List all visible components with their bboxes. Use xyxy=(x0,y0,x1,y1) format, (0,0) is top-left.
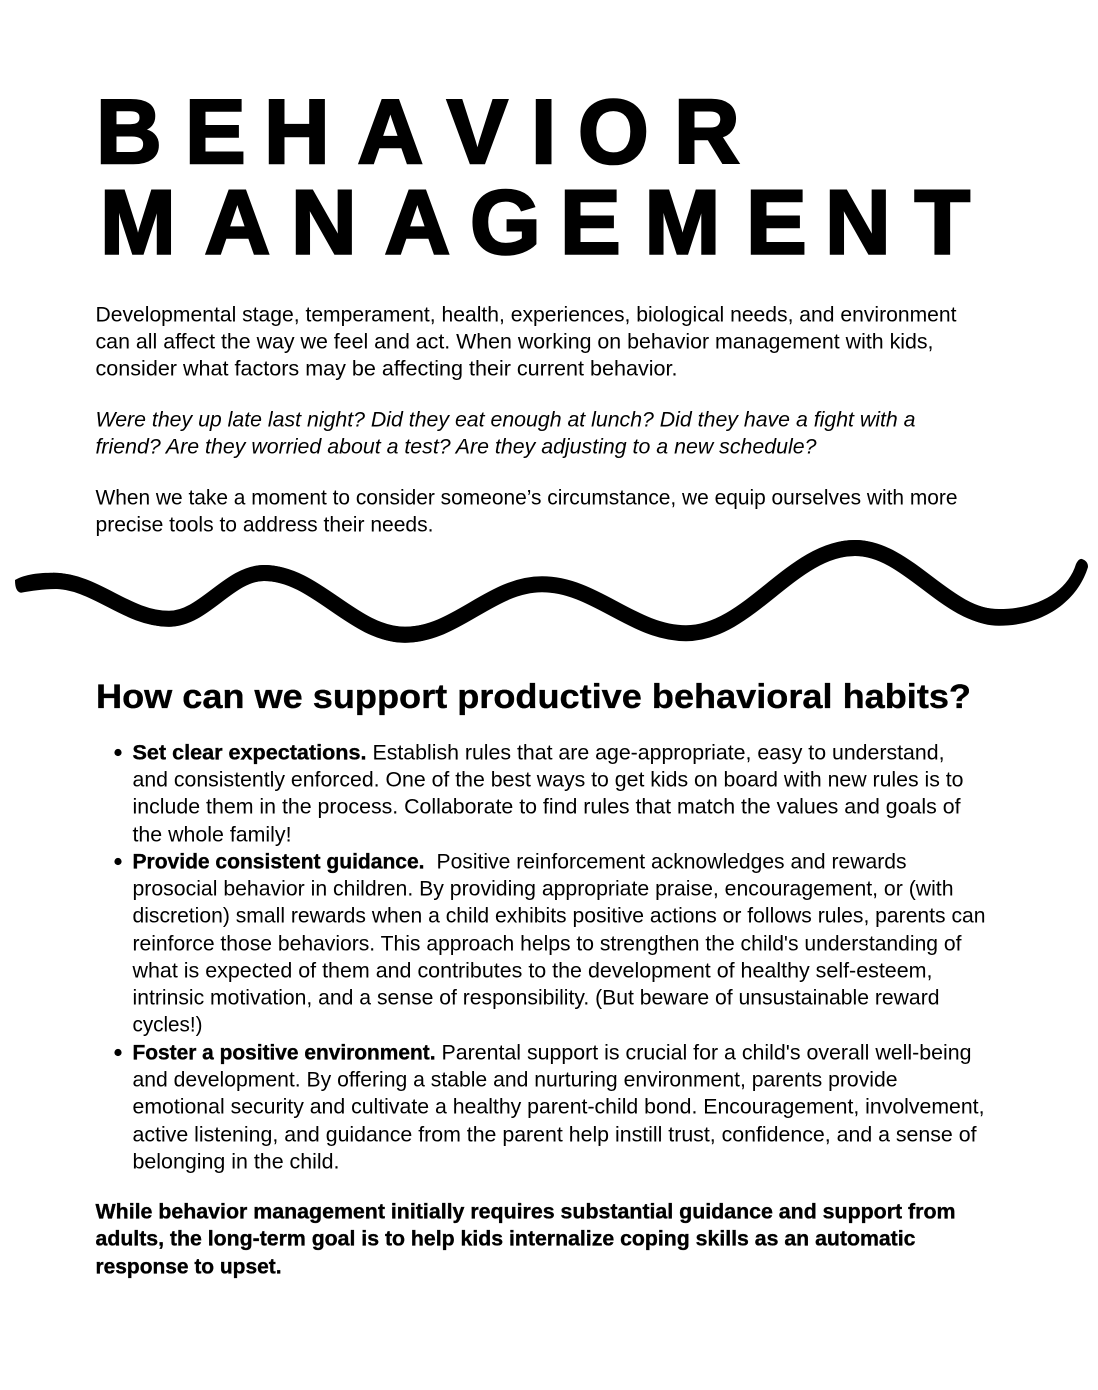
closing statement: response to upset. xyxy=(96,1256,282,1278)
closing statement xyxy=(96,1200,956,1278)
closing statement: adults, the long-term goal is to help kids internalize coping skills as an automatic xyxy=(96,1228,916,1250)
intro paragraph: Developmental stage, temperament, health, experiences, biological needs, and environment xyxy=(96,303,957,326)
wavy divider xyxy=(15,540,1088,643)
list item: set clear expectations xyxy=(114,742,964,846)
italic questions paragraph: Were they up late last night? Did they eat enough at lunch? Did they have a fight with a xyxy=(96,408,916,431)
list item: provide consistent guidance: reinforce those behaviors. This approach helps to strengthen the child's understanding of xyxy=(132,932,962,956)
section heading: How can we support productive behavioral habits? xyxy=(96,678,971,716)
list item: set clear expectations: Set clear expectations. xyxy=(132,742,366,764)
list item: foster a positive environment: active listening, and guidance from the parent help instill trust, confidence, and a sense of xyxy=(132,1124,977,1146)
list item: provide consistent guidance xyxy=(114,850,985,1036)
circumstance paragraph: When we take a moment to consider someone’s circumstance, we equip ourselves with more xyxy=(96,486,958,509)
circumstance paragraph xyxy=(96,486,958,536)
list item: provide consistent guidance: intrinsic motivation, and a sense of responsibility. (But beware of unsustainable reward xyxy=(132,986,939,1010)
title: MANAGEMENT xyxy=(100,172,970,274)
list item: foster a positive environment: Foster a positive environment. xyxy=(132,1042,436,1064)
title xyxy=(96,82,970,274)
list item: provide consistent guidance: prosocial behavior in children. By providing appropriate praise, encouragement, or (with xyxy=(132,878,954,900)
closing statement: While behavior management initially requires substantial guidance and support from xyxy=(96,1200,956,1224)
list item: provide consistent guidance: cycles!) xyxy=(132,1014,202,1036)
list item: set clear expectations: include them in the process. Collaborate to find rules that match the values and goals of xyxy=(132,796,961,818)
italic questions paragraph: friend? Are they worried about a test? Are they adjusting to a new schedule? xyxy=(96,435,817,458)
list item: foster a positive environment xyxy=(114,1042,984,1174)
list item: set clear expectations: Establish rules that are age-appropriate, easy to understand, xyxy=(372,742,944,764)
intro paragraph: can all affect the way we feel and act. When working on behavior management with kids, xyxy=(96,330,934,353)
list item: foster a positive environment: emotional security and cultivate a healthy parent-child bond. Encouragement, involvement, xyxy=(132,1096,984,1118)
list item: set clear expectations: and consistently enforced. One of the best ways to get kids on board with new rules is to xyxy=(132,768,964,792)
list item: set clear expectations: the whole family! xyxy=(132,824,292,846)
list item: foster a positive environment: belonging in the child. xyxy=(132,1150,340,1174)
circumstance paragraph: precise tools to address their needs. xyxy=(96,513,433,536)
list item: foster a positive environment: Parental support is crucial for a child's overall well-being xyxy=(442,1042,972,1064)
italic questions paragraph xyxy=(96,408,916,458)
list item: provide consistent guidance: Provide consistent guidance. xyxy=(132,850,424,874)
title: BEHAVIOR xyxy=(96,82,740,183)
list item: provide consistent guidance: what is expected of them and contributes to the development of healthy self-esteem, xyxy=(131,960,933,982)
list item: provide consistent guidance: Positive reinforcement acknowledges and rewards xyxy=(436,850,906,874)
intro paragraph xyxy=(96,303,957,380)
list item: provide consistent guidance: discretion) small rewards when a child exhibits positive actions or follows rules, parents can xyxy=(132,904,986,928)
intro paragraph: consider what factors may be affecting their current behavior. xyxy=(96,357,678,380)
list item: foster a positive environment: and development. By offering a stable and nurturing environment, parents provide xyxy=(132,1068,898,1092)
